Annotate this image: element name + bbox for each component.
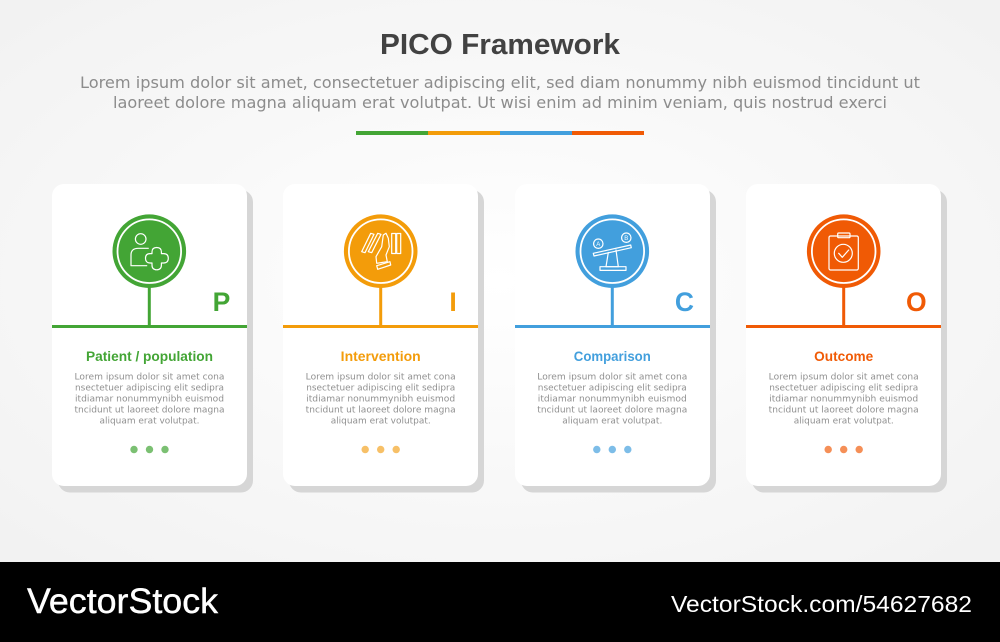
body text: tncidunt ut laoreet dolore magna bbox=[306, 406, 456, 416]
card bbox=[283, 184, 478, 486]
icon: patient with medical cross bbox=[112, 214, 186, 288]
panel: C comparison bbox=[515, 184, 716, 492]
body text bbox=[537, 372, 687, 426]
body text: itdiamar nonummynibh euismod bbox=[538, 394, 687, 404]
letter I: I bbox=[449, 287, 457, 317]
icon: hand with falling dominoes bbox=[344, 214, 418, 288]
title: PICO Framework bbox=[380, 29, 621, 61]
heading: Outcome bbox=[814, 349, 874, 364]
card bbox=[515, 184, 710, 486]
body text: aliquam erat volutpat. bbox=[794, 416, 894, 426]
dots bbox=[362, 446, 400, 453]
subtitle text: Lorem ipsum dolor sit amet, consectetuer adipiscing elit, sed diam nonummy nibh euismod tincidunt ut bbox=[80, 74, 920, 92]
heading: Comparison bbox=[574, 349, 651, 364]
divider line and stem bbox=[52, 285, 247, 326]
icon: balance scale seesaw: B bbox=[624, 236, 628, 242]
card shadow bbox=[521, 190, 716, 492]
body text: tncidunt ut laoreet dolore magna bbox=[74, 406, 224, 416]
card shadow bbox=[752, 190, 947, 492]
body text: aliquam erat volutpat. bbox=[331, 416, 431, 426]
divider line and stem bbox=[746, 285, 941, 326]
panel: O outcome bbox=[746, 184, 947, 492]
panel: I intervention bbox=[283, 184, 484, 492]
body text: nsectetuer adipiscing elit sedipra bbox=[306, 384, 455, 394]
divider line and stem bbox=[515, 285, 710, 326]
heading: Patient / population bbox=[86, 349, 213, 364]
body text: Lorem ipsum dolor sit amet cona bbox=[537, 372, 687, 382]
body text bbox=[306, 372, 456, 426]
letter P: P bbox=[213, 287, 230, 317]
letter O: O bbox=[906, 287, 927, 317]
body text: nsectetuer adipiscing elit sedipra bbox=[769, 384, 918, 394]
letter C: C bbox=[675, 287, 694, 317]
body text: Lorem ipsum dolor sit amet cona bbox=[306, 372, 456, 382]
heading: Intervention bbox=[341, 349, 421, 364]
body text: aliquam erat volutpat. bbox=[100, 416, 200, 426]
body text: aliquam erat volutpat. bbox=[562, 416, 662, 426]
body text: tncidunt ut laoreet dolore magna bbox=[769, 406, 919, 416]
body text: Lorem ipsum dolor sit amet cona bbox=[74, 372, 224, 382]
colored divider bbox=[356, 131, 644, 135]
body text: nsectetuer adipiscing elit sedipra bbox=[538, 384, 687, 394]
subtitle text: laoreet dolore magna aliquam erat volutpat. Ut wisi enim ad minim veniam, quis nostrud exerci bbox=[113, 94, 887, 112]
icon: clipboard with check bbox=[807, 214, 880, 288]
body text: tncidunt ut laoreet dolore magna bbox=[537, 406, 687, 416]
card shadow bbox=[58, 190, 253, 492]
icon: balance scale seesaw bbox=[576, 214, 649, 288]
dots bbox=[130, 446, 169, 453]
dots bbox=[593, 446, 632, 453]
body text bbox=[74, 372, 224, 426]
body text: itdiamar nonummynibh euismod bbox=[769, 394, 918, 404]
divider line and stem bbox=[283, 285, 478, 326]
body text bbox=[769, 372, 919, 426]
body text: Lorem ipsum dolor sit amet cona bbox=[769, 372, 919, 382]
panel: P patient / population bbox=[52, 184, 253, 492]
subtitle text bbox=[80, 74, 920, 112]
card bbox=[52, 184, 247, 486]
footer url text: VectorStock.com/54627682 bbox=[671, 591, 972, 617]
dots bbox=[824, 446, 863, 453]
footer logo text: VectorStock bbox=[27, 582, 219, 621]
body text: itdiamar nonummynibh euismod bbox=[306, 394, 455, 404]
card bbox=[746, 184, 941, 486]
footer band bbox=[0, 562, 1000, 642]
body text: itdiamar nonummynibh euismod bbox=[75, 394, 224, 404]
card shadow bbox=[289, 190, 484, 492]
body text: nsectetuer adipiscing elit sedipra bbox=[75, 384, 224, 394]
icon: balance scale seesaw: A bbox=[596, 242, 600, 248]
